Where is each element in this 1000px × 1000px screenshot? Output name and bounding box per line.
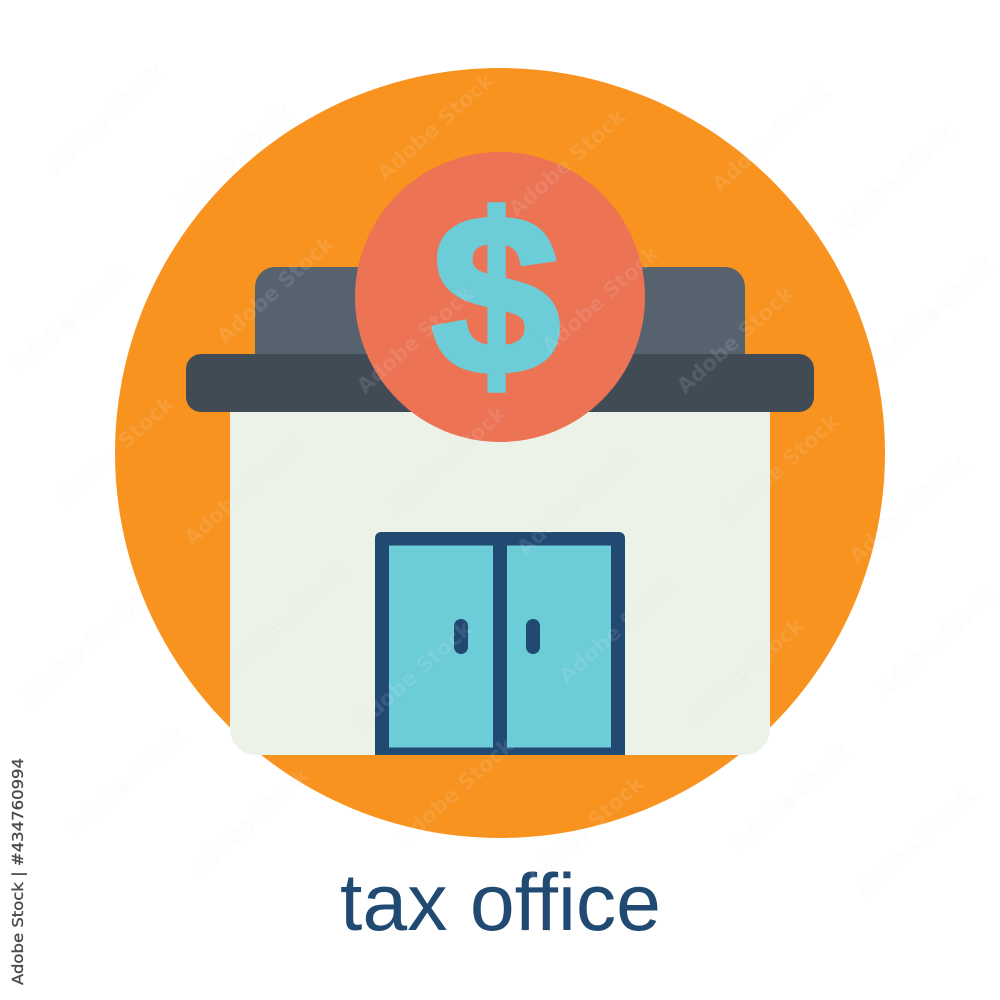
stock watermarks: Adobe Stock xyxy=(672,281,799,398)
caption: tax office xyxy=(340,858,661,948)
left door handle xyxy=(454,619,468,654)
right door handle xyxy=(526,619,540,654)
right door panel xyxy=(507,546,611,748)
stock credit: Adobe Stock | #434760994 xyxy=(9,758,27,985)
stock watermarks: Adobe Stock xyxy=(350,616,477,733)
stock watermarks: Adobe Stock xyxy=(707,79,834,196)
badge circle xyxy=(355,152,645,442)
building wall xyxy=(230,412,770,755)
door frame xyxy=(375,532,625,755)
stock watermarks: Adobe Stock xyxy=(212,231,339,348)
stock watermarks: Adobe Stock xyxy=(682,613,809,730)
stock watermarks: Adobe Stock xyxy=(852,784,979,901)
lower roof band xyxy=(186,354,814,412)
stock watermarks: Adobe Stock xyxy=(7,261,134,378)
stock watermarks: Adobe Stock xyxy=(512,443,639,560)
stock watermarks: Adobe Stock xyxy=(169,99,296,216)
stock watermarks: Adobe Stock xyxy=(844,451,971,568)
double door xyxy=(375,532,625,755)
stock watermarks: Adobe Stock xyxy=(504,104,631,221)
stock watermarks: Adobe Stock xyxy=(392,733,519,850)
stock watermarks: Adobe Stock xyxy=(522,771,649,888)
stock watermarks: Adobe Stock xyxy=(554,571,681,688)
dollar badge xyxy=(355,152,645,442)
stock watermarks: Adobe Stock xyxy=(179,433,306,550)
stock watermarks: Adobe Stock xyxy=(872,584,999,701)
dollar sign: $ xyxy=(432,169,560,422)
stock watermarks: Adobe Stock xyxy=(42,61,169,178)
stock watermarks: Adobe Stock xyxy=(727,739,854,856)
stock watermarks: Adobe Stock xyxy=(872,251,999,368)
stock watermarks: Adobe Stock xyxy=(62,723,189,840)
stock watermarks: Adobe Stock xyxy=(832,121,959,238)
upper roof block xyxy=(255,267,745,377)
stock watermarks: Adobe Stock xyxy=(52,391,179,508)
stock watermarks: Adobe Stock xyxy=(352,281,479,398)
stock watermarks: Adobe Stock xyxy=(717,409,844,526)
stock watermarks: Adobe Stock xyxy=(372,68,499,185)
stock watermarks: Adobe Stock xyxy=(222,561,349,678)
orange background circle xyxy=(115,68,885,838)
stock watermarks: Adobe Stock xyxy=(187,763,314,880)
stock watermarks: Adobe Stock xyxy=(17,593,144,710)
stock watermarks: Adobe Stock xyxy=(384,401,511,518)
left door panel xyxy=(389,546,493,748)
stock watermarks: Adobe Stock xyxy=(537,241,664,358)
